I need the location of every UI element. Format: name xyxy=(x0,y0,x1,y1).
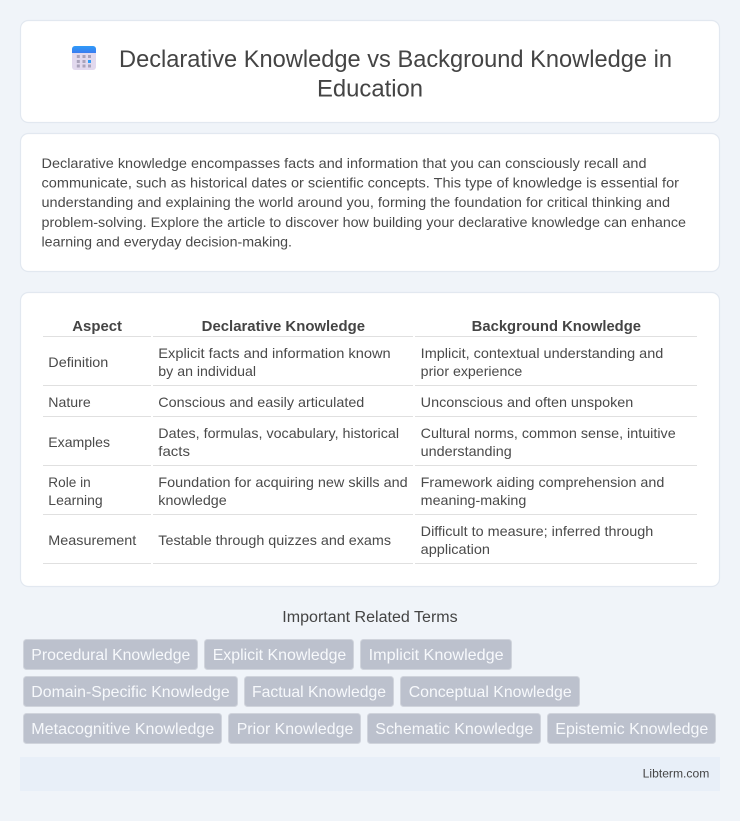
text block: description: communicate, such as historical dates or scientific concepts. This type of knowledge is essential for xyxy=(42,175,679,191)
table row: nature: Nature xyxy=(48,394,91,410)
table row: definition: Implicit, contextual understanding and xyxy=(421,345,663,361)
tag: domain-specific knowledge: Domain-Specific Knowledge xyxy=(31,684,230,701)
title: Declarative Knowledge vs Background Knowledge in xyxy=(119,46,672,73)
panel: footer xyxy=(20,757,720,791)
table header row: Declarative Knowledge xyxy=(202,319,365,335)
table row: measurement xyxy=(48,523,653,557)
table header row: Aspect xyxy=(72,319,122,335)
text block: description: Declarative knowledge encompasses facts and information that you can consciously recall and xyxy=(42,155,647,171)
tag: conceptual knowledge xyxy=(400,676,580,706)
table row: examples: Examples xyxy=(48,434,110,450)
tag: factual knowledge: Factual Knowledge xyxy=(252,684,386,701)
table row: examples xyxy=(48,425,676,459)
table row: measurement: application xyxy=(421,541,490,557)
tag: prior knowledge xyxy=(228,714,360,744)
table row: definition: Explicit facts and information known xyxy=(158,345,391,361)
table row: measurement: Measurement xyxy=(48,532,136,548)
panel: comparison table xyxy=(20,292,720,586)
table row: role in learning: Foundation for acquiring new skills and xyxy=(158,474,408,490)
tag: epistemic knowledge: Epistemic Knowledge xyxy=(555,721,708,738)
table row: definition: Definition xyxy=(48,354,108,370)
tag: implicit knowledge: Implicit Knowledge xyxy=(369,647,504,664)
text block: description: understanding and explaining the world around you, forming the foundation for critical thinking and xyxy=(42,194,670,210)
text block: description: learning and everyday decision-making. xyxy=(42,233,292,249)
tag: explicit knowledge: Explicit Knowledge xyxy=(213,647,346,664)
tag: prior knowledge: Prior Knowledge xyxy=(237,721,353,738)
table row: examples: facts xyxy=(158,443,190,459)
heading: related terms: Important Related Terms xyxy=(282,609,458,626)
table header row: Background Knowledge xyxy=(472,319,641,335)
tag: metacognitive knowledge xyxy=(24,714,222,744)
table row: nature xyxy=(48,394,633,410)
table row: role in learning: Learning xyxy=(48,492,103,508)
tag: schematic knowledge xyxy=(368,714,540,744)
table row: role in learning: knowledge xyxy=(158,492,227,508)
table row: nature: Unconscious and often unspoken xyxy=(421,394,633,410)
tag: domain-specific knowledge xyxy=(24,676,238,706)
table row: examples: understanding xyxy=(421,443,512,459)
table row: examples: Dates, formulas, vocabulary, historical xyxy=(158,425,399,441)
table row: role in learning: meaning-making xyxy=(421,492,526,508)
panel: related term tags xyxy=(24,640,716,744)
text block: description: problem-solving. Explore the article to discover how building your declarative knowledge can enhance xyxy=(42,214,686,230)
tag: metacognitive knowledge: Metacognitive Knowledge xyxy=(31,721,214,738)
table row: role in learning xyxy=(48,474,664,508)
table row: definition: prior experience xyxy=(421,363,523,379)
footer source: Libterm.com xyxy=(643,766,709,780)
table row: role in learning: Role in xyxy=(48,474,91,490)
panel: header xyxy=(20,20,720,122)
title: Education xyxy=(317,76,423,102)
table row: examples: Cultural norms, common sense, intuitive xyxy=(421,425,676,441)
tag: schematic knowledge: Schematic Knowledge xyxy=(375,721,533,738)
tag: procedural knowledge: Procedural Knowledge xyxy=(31,647,190,664)
table header row xyxy=(72,319,641,335)
tag: epistemic knowledge xyxy=(548,714,716,744)
tag: implicit knowledge xyxy=(360,640,512,670)
tag: factual knowledge xyxy=(244,676,394,706)
icon: calendar xyxy=(72,46,96,70)
table row: measurement: Difficult to measure; inferred through xyxy=(421,523,653,539)
tag: conceptual knowledge: Conceptual Knowledge xyxy=(409,684,572,701)
tag: explicit knowledge xyxy=(204,640,354,670)
table row: measurement: Testable through quizzes and exams xyxy=(158,532,391,548)
title xyxy=(119,46,672,102)
table row: definition: by an individual xyxy=(158,363,256,379)
panel: intro text xyxy=(20,134,720,272)
tag: procedural knowledge xyxy=(24,640,198,670)
table row: role in learning: Framework aiding comprehension and xyxy=(421,474,664,490)
table row: definition xyxy=(48,345,663,379)
table row: nature: Conscious and easily articulated xyxy=(158,394,364,410)
text block: description xyxy=(42,155,686,249)
